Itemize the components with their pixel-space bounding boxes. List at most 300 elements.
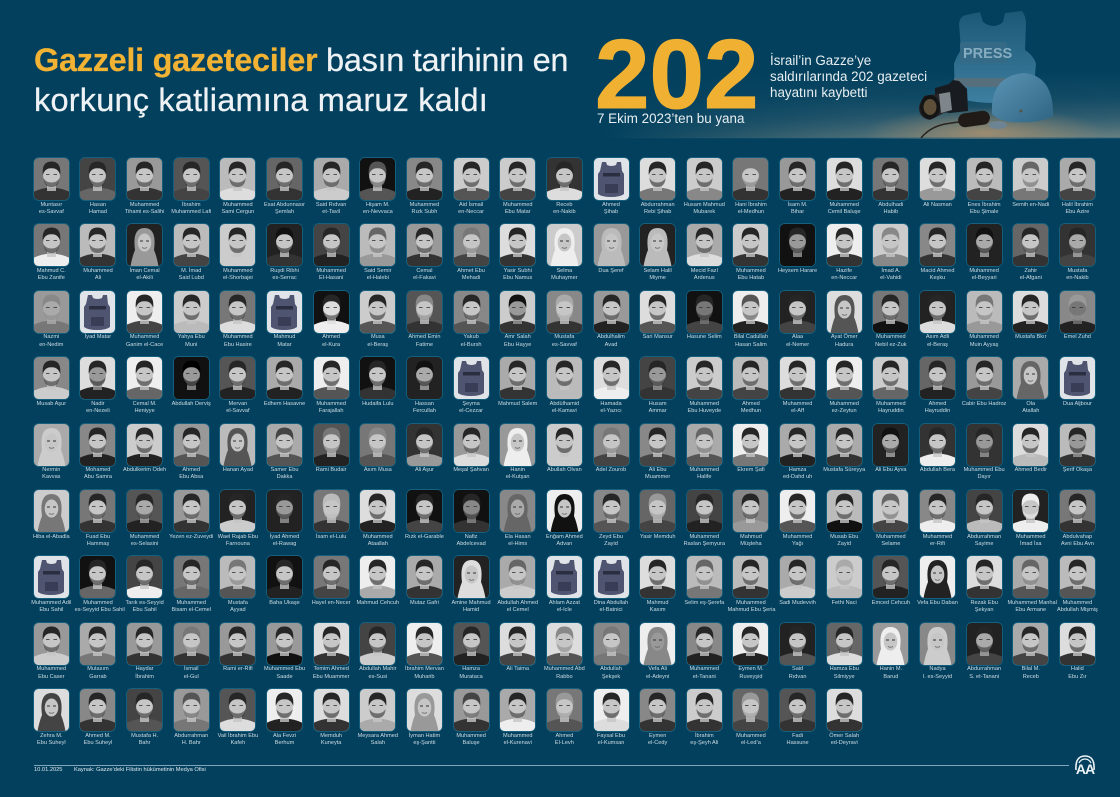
portrait: Muhammed er-Rifi [914,490,961,556]
portrait: Hişam M. en-Nevvaca: Hişam M. [366,202,390,208]
portrait: Muhammed el-Shorbajei: Muhammed [223,268,253,274]
portrait: Dua Şeref [593,223,630,274]
portrait: Hasan Hamad: Hamad [89,209,107,215]
portrait: Muhammed Halife: Halife [697,474,711,480]
portrait: Zehra M. Ebu Suheyl: Zehra M. [40,733,63,739]
portrait: Mutaz Gafri: Mutaz Gafri [410,600,439,606]
portrait: Hassan Fercullah: Fercullah [413,408,436,414]
portrait: Hazife en-Neccar [821,224,868,291]
portrait: İyad Ahmed el-Rawag [261,490,308,556]
portrait: Ahmed Hayruddin: Ahmed [929,401,946,407]
portrait: Amine Mahmud Hamid: Amine Mahmud [451,600,491,606]
portrait: Mahmud Kasım [634,556,681,623]
portrait: Ali Nasman [919,157,956,208]
portrait: Hudaifa Lulu [354,357,401,424]
portrait: Mustafa Süreyya [821,424,868,490]
portrait: Mustafa H. Bahr: Bahr [139,740,151,746]
portrait: Receb en-Nakib [546,157,583,215]
portrait: Muhammed Baluşe: Muhammed [456,733,486,739]
portrait: Ela Hasan el-Hims [494,490,541,556]
portrait: Muhammed Ebu Saade: Saade [276,674,293,680]
portrait: Nermin Kavvas: Kavvas [42,474,60,480]
portrait: Eymen el-Cedy [634,689,681,756]
portrait: Yezen ez-Zuveydi: Yezen ez-Zuveydi [169,534,213,540]
portrait: Abdülhamid el-Kamavi [541,357,588,424]
portrait: Muhammed Ebu Matar: Ebu Matar [505,209,531,215]
portrait: Emel Zuhd: Emel Zuhd [1064,334,1091,340]
portrait: Muhammed Nebil ez-Zuk: Muhammed [876,334,906,340]
portrait: Fethi Naci [821,556,868,623]
portrait: Enğam Ahmed Advan: Advan [556,541,572,547]
portrait: Hanan Ayad: Hanan Ayad [223,467,253,473]
portrait: Heysem Harare: Heysem Harare [778,268,817,274]
portrait: Zeyd Ebu Zayid: Zeyd Ebu [599,534,623,540]
portrait: Cemal M. Heniyye [121,357,168,424]
portrait: Ahmed Medhun: Ahmed [742,401,760,407]
portrait: Muhammed Abd Rabbo: Rabbo [556,674,573,680]
portrait: Mustafa en-Nakib: Mustafa [1067,268,1087,274]
portrait: Muhammed es-Seyyid Ebu Sahil: es-Seyyid Ebu Sahil [75,607,125,613]
portrait: Eymen el-Cedy: Eymen [649,733,666,739]
portrait: Muhammed Ebu Huveyde [681,357,728,424]
icon: camera [919,80,968,120]
portrait: Mahmud Cehcuh [354,556,401,623]
portrait: Ruşdi Ribhi es-Serrac: es-Serrac [272,275,297,281]
portrait: Nazmi en-Nedim [28,291,75,357]
portrait: Halid Ebu Zır: Ebu Zır [1068,674,1087,680]
portrait: Rezak Ebu Şekyan [961,556,1007,623]
portrait: Muhammed er-Rifi: Muhammed [923,534,952,540]
portrait: Mustafa es-Savvaf: Mustafa [554,334,574,340]
portrait: Muhammed ez-Zeytun: Muhammed [829,401,859,407]
portrait: Meysara Ahmed Salah [354,689,401,756]
portrait: Eymen M. Ruveyşid [728,623,774,689]
portrait: Haydar İbrahim [121,623,168,689]
portrait: Muhammed Tihami es-Salihi: Tihami es-Salihi [125,209,164,215]
portrait: Halil İbrahim Ebu Azire: Halil İbrahim [1062,202,1093,208]
portrait: Hasan Hamad [79,157,116,215]
portrait: Muhammed el-Aff [774,357,821,424]
portrait: Yahya Ebu Muni: Muni [185,342,197,348]
lead text [770,52,927,100]
portrait: Rızk el-Garable: Rızk el-Garable [405,534,444,540]
header image: press vest, helmet, camera and microphone on sand [626,11,1120,139]
portrait: Bilal Cadullah Hasan Salim: Hasan Salim [735,342,767,348]
portrait: Muhammed el-Shorbajei: el-Shorbajei [223,275,253,281]
portrait: Muhammed ez-Zeytun [821,357,868,424]
portrait: Ahmed el-Kura: el-Kura [322,342,340,348]
portrait: Aid İsmail en-Neccar: en-Neccar [458,209,484,215]
portrait: Abdurrahman Sayime: Sayime [975,541,993,547]
portrait: Abdullah Mahir es-Susi: Abdullah Mahir [359,666,396,672]
portrait: Dua Şeref: Dua Şeref [598,268,624,274]
portrait: Muhammed Ebu Hasire [215,291,261,357]
portrait: Muhammed Ebu Dayır [961,424,1007,490]
portrait: Bilal M. Receb [1007,623,1054,689]
portrait: Ola Atallah: Ola [1026,401,1035,407]
portrait: Abdurrahman Rebi Şihab: Abdurrahman [641,202,675,208]
portrait: Abdullah Mahir es-Susi: es-Susi [368,674,387,680]
portrait: Hani İbrahim el-Medhun [732,157,769,215]
portrait: Muhammed Rızk Subh: Rızk Subh [412,209,437,215]
portrait: Abdurrahman S. et-Tanani [961,623,1007,689]
portrait: Abdülhamid el-Kamavi: el-Kamavi [552,408,577,414]
portrait: Selam Halil Miyme: Selam Halil [644,268,672,274]
portrait: Muhammed Ebu Saade: Muhammed Ebu [264,666,305,672]
portrait: Ahmed Medhun: Medhun [741,408,761,414]
portrait: İyman Hatim eş-Şantti: İyman Hatim [409,733,440,739]
portrait: Enes İbrahim Ebu Şimale: Ebu Şimale [970,209,998,215]
portrait: Tarık es-Seyyid Ebu Sahil [121,556,168,623]
portrait: Abdulhalim Avad: Avad [605,342,617,348]
portrait: Hamza Ebu Silmiyye: Hamza Ebu [830,666,859,672]
portrait: Sadi Mudevvih: Sadi Mudevvih [779,600,816,606]
portrait: Muhammed Ganim el-Cace: Ganim el-Cace [126,342,163,348]
portrait: Muhammed Farajallah: Farajallah [319,408,343,414]
portrait: Ahmed M. Ebu Suheyl: Ahmed M. [85,733,111,739]
portrait: Muhammed Halife: Muhammed [690,467,719,473]
portrait: Vail İbrahim Ebu Kafeh: Vail İbrahim Ebu [218,733,258,739]
portrait: Abdullah Ahmed el Cemel [494,556,541,623]
portrait: Hanin M. Barud: Barud [883,674,898,680]
portrait: Wael Rajab Ebu Farnouna: Wael Rajab Ebu [218,534,258,540]
portrait: Semih en-Nadi [1012,157,1049,208]
portrait: Yakub el-Bursh [448,291,494,357]
portrait: Mervan el-Savvaf: el-Savvaf [226,408,250,414]
portrait: Nermin Kavvas [28,424,75,490]
portrait: Yasir Subhi Ebu Namus [499,223,536,281]
portrait: Hamza ed-Dahd uh: Hamza [789,467,806,473]
portrait: Fadi Hassune [774,689,821,756]
portrait: Muhammed Abd Rabbo: Muhammed Abd [544,666,585,672]
portrait: Ali Ebu Ayva: Ali Ebu Ayva [875,467,906,473]
portrait: Muhammed Tihami es-Salihi [124,157,164,215]
portrait: İyad Ahmed el-Rawag: el-Rawag [273,541,296,547]
portrait: Hanin el-Kutşan: el-Kutşan [506,474,530,480]
icon: AA logo [1074,754,1096,776]
portrait: Ahmed Ebu Absa: Ebu Absa [179,474,203,480]
portrait: Mervan el-Savvaf [215,357,261,424]
portrait: Muhammed et-Tanani: Muhammed [690,666,719,672]
portrait: Mustafa Süreyya: Mustafa Süreyya [823,467,865,473]
portrait: Haydar İbrahim: İbrahim [135,674,154,680]
portrait: Receb en-Nakib: Receb [556,202,572,208]
portrait: Muhammed Baluşe [448,689,494,756]
portrait: Mustafa H. Bahr: Mustafa H. [131,733,158,739]
portrait: Ala Fevzi Berhum: Berhum [275,740,294,746]
portrait: Edhem Hasavne: Edhem Hasavne [264,401,305,407]
portrait: Muhammed Abdullah Mişmiş: Abdullah Mişmiş [1057,607,1098,613]
portrait: Muhammed Cemil Baluşe: Muhammed [829,202,859,208]
portrait: Muhammed Raslan Şemyura [681,490,728,556]
portrait: Temim Ahmed Ebu Muammer: Ebu Muammer [313,674,350,680]
portrait: Muhammed Abdullah Mişmiş [1054,556,1101,623]
portrait: Haydar İbrahim: Haydar [136,666,154,672]
portrait: Mustafa H. Bahr [121,689,168,756]
portrait: Hamza Ebu Silmiyye [821,623,868,689]
portrait: Abdullah Bera: Abdullah Bera [920,467,955,473]
portrait: Cemal M. Heniyye: Cemal M. [133,401,157,407]
portrait: İbrahim eş-Şeyh Ali [681,689,728,756]
portrait: Ahmed El-Levh: Ahmed [556,733,573,739]
portrait: Muhammed Sami Cergun: Muhammed [223,202,253,208]
portrait: Tarık es-Seyyid Ebu Sahil: Ebu Sahil [133,607,157,613]
portrait: Hanin el-Kutşan: Hanin [510,467,525,473]
portrait: Muntasır es-Savvaf: Muntasır [40,202,62,208]
portrait: Asım Musa [354,424,401,490]
portrait: Fadi Hassune: Hassune [787,740,809,746]
portrait: Vail İbrahim Ebu Kafeh [215,689,261,756]
portrait: Muhammed Manhal Ebu Armane: Muhammed Manhal [1007,600,1057,606]
portrait: Hişam M. en-Nevvaca [359,157,396,215]
portrait: İbrahim eş-Şeyh Ali: İbrahim [695,733,714,739]
portrait: Alaa el-Nemer [774,291,821,357]
portrait: Ahmed Emin Fatime [401,291,448,357]
portrait: İsmail el-Gul [168,623,215,689]
portrait: Ruşdi Ribhi es-Serrac [266,223,303,281]
portrait: Abdurrahman Sayime: Abdurrahman [967,534,1001,540]
portrait: Halid Ebu Zır [1054,623,1101,689]
portrait: Mustafa es-Savvaf: es-Savvaf [552,342,577,348]
portrait: Adel Zourob [588,424,634,490]
portrait: Macid Ahmed Keşku [914,224,961,291]
portrait: Sari Mansur: Sari Mansur [643,334,673,340]
portrait: Nazmi en-Nedim: Nazmi [43,334,59,340]
portrait: Ela Hasan el-Hims: el-Hims [508,541,527,547]
portrait: Muhammed Cemil Baluşe: Cemil Baluşe [828,209,861,215]
portrait: Hamada el-Yazıcı: Hamada [600,401,622,407]
portrait: Muhammed Selame: Muhammed [876,534,906,540]
portrait: Musab Aşur: Musab Aşur [37,401,66,407]
portrait: Mecid Fazl Ardenus: Ardenus [694,275,715,281]
portrait: Muhammed Ebu Hatab [728,224,774,291]
portrait: Zahir el-Afgani [1007,224,1054,291]
portrait: Eymen el-Cedy: el-Cedy [648,740,667,746]
portrait: Enğam Ahmed Advan [541,490,588,556]
portrait: Rezak Ebu Şekyan: Rezak Ebu [970,600,998,606]
portrait: Faysal Ebu el-Kumsan: el-Kumsan [598,740,624,746]
portrait: Alaa el-Nemer: Alaa [792,334,803,340]
portrait: Muhammed İmad İsa: İmad İsa [1020,541,1042,547]
portrait: Muhammed Sami Cergun: Sami Cergun [222,209,254,215]
portrait: Muhammed Manhal Ebu Armane: Ebu Armane [1015,607,1046,613]
portrait: Cemal el-Fakavi [406,223,443,281]
portrait: Said Rıdvan: Said [792,666,803,672]
portrait: Abdullah Mahir es-Susi [354,623,401,689]
portrait: Ali Aşur [401,424,448,490]
portrait: Alaa el-Nemer: el-Nemer [786,342,809,348]
portrait: Fadi Hassune: Fadi [792,733,803,739]
portrait: Wael Rajab Ebu Farnouna [215,490,261,556]
icon: microphone [921,110,1007,138]
portrait: Muhammed Ebu Saade [261,623,308,689]
portrait: Yasir Memduh [634,490,681,556]
portrait: Mustafa Bkır: Mustafa Bkır [1015,334,1046,340]
portrait: Yasir Subhi Ebu Namus: Yasir Subhi [504,268,532,274]
portrait: Musab Ebu Zayid: Musab Ebu [830,534,858,540]
portrait: Sadi Mudevvih [774,556,821,623]
portrait: Abdullah Ahmed el Cemel: Abdullah Ahmed [497,600,538,606]
portrait: Muhammed Bisam el-Cemel: Muhammed [176,600,206,606]
portrait: Ayat Ömer Hadura [821,291,868,357]
portrait: Mahmud C. Ebu Zanife: Ebu Zanife [38,275,65,281]
portrait: Said Semir el-Halebi: el-Halebi [367,275,389,281]
portrait: Dina Abdullah el-Batnici [588,556,634,623]
portrait: Rızk el-Garable [401,490,448,556]
portrait: Yahya Ebu Muni [168,291,215,357]
portrait: Fuad Ebu Hammaş: Hammaş [87,541,109,547]
portrait: Ahmed Emin Fatime: Fatime [416,342,433,348]
portrait: İyad Ahmed el-Rawag: İyad Ahmed [270,534,299,540]
portrait: Hamza ed-Dahd uh: ed-Dahd uh [783,474,812,480]
portrait: Halil İbrahim Ebu Azire [1059,157,1096,215]
portrait: Ahlam Azzat el-Icle [541,556,588,623]
portrait: Muhammed el-Kurenavi [494,689,541,756]
portrait: Muhammed Farajallah: Muhammed [316,401,346,407]
portrait: İsam el-Lulu: İsam el-Lulu [316,534,346,540]
portrait: Ahmet Ebu Mehadi: Ahmet Ebu [457,268,485,274]
portrait: Muhammed Nebil ez-Zuk: Nebil ez-Zuk [875,342,907,348]
portrait: Hamza ed-Dahd uh [774,424,821,490]
portrait: Bilal Cadullah Hasan Salim [728,291,774,357]
portrait: Abullah Olvan [541,424,588,490]
portrait: Baha Ukaşe: Baha Ukaşe [269,600,300,606]
portrait: Muhammed Hayruddin: Muhammed [876,401,906,407]
portrait: Muhammed es-Seyyid Ebu Sahil: Muhammed [83,600,113,606]
portrait: Mohamed Abu Samra: Mohamed [86,467,110,473]
portrait: Ahmed el-Kura [308,291,354,357]
portrait: Ruşdi Ribhi es-Serrac: Ruşdi Ribhi [270,268,299,274]
portrait: Muhammed Ataallah: Muhammed [363,534,393,540]
portrait: Said Rıdvan [774,623,821,689]
portrait: Abdurrahman Rebi Şihab: Rebi Şihab [644,209,671,215]
portrait: İman Cemal el-Akili [126,223,163,281]
portrait: Husam Ammar [634,357,681,424]
portrait: Cabir Ebu Hadroz [961,357,1007,424]
portrait: Ali Ebu Muammer [634,424,681,490]
big number 202: 202 [595,19,759,129]
portrait: Abdulkerim Odeh: Abdulkerim Odeh [123,467,166,473]
portrait: Hasan Hamad: Hasan [90,202,106,208]
portrait: M. İmad Said Lubd: Said Lubd [179,275,204,281]
portrait: Asım Adli el-Beraş: el-Beraş [927,342,948,348]
portrait: Selma Muhaymer: Muhaymer [551,275,578,281]
portrait: Semih en-Nadi: Semih en-Nadi [1012,202,1049,208]
portrait: Muhammed Rızk Subh: Muhammed [410,202,439,208]
portrait: Nadir en-Nezeli: en-Nezeli [86,408,110,414]
portrait: Mahmud C. Ebu Zanife: Mahmud C. [37,268,66,274]
portrait: Said Rıdvan et-Tavil: Said Rıdvan [316,202,346,208]
portrait: Muhammed Farajallah [308,357,354,424]
portrait: Meysara Ahmed Salah: Salah [371,740,385,746]
portrait: Muhammed Nebil ez-Zuk [868,291,914,357]
portrait: Hassan Fercullah: Hassan [415,401,434,407]
panel: journalist portrait grid [31,157,1098,746]
portrait: Faysal Ebu el-Kumsan [588,689,634,756]
portrait: Ekrem Şafi [728,424,774,490]
portrait: Heysem Harare [774,224,821,291]
portrait: İman Cemal el-Akili: el-Akili [136,275,153,281]
portrait: Muhammed er-Rifi: er-Rifi [930,541,945,547]
portrait: Nafiz Abdelcevad: Abdelcevad [456,541,486,547]
portrait: Husam Ammar: Husam [649,401,666,407]
portrait: Enes İbrahim Ebu Şimale [966,157,1003,215]
portrait: Muhammed el-Aff: Muhammed [783,401,812,407]
portrait: Asım Adli el-Beraş [914,291,961,357]
portrait: Nadir en-Nezeli: Nadir [91,401,105,407]
portrait: Abdurrahman H. Bahr: Abdurrahman [174,733,208,739]
portrait: Ali Aşur: Ali Aşur [415,467,434,473]
portrait: Abdülhamid el-Kamavi: Abdülhamid [550,401,579,407]
portrait: Nazmi en-Nedim: en-Nedim [39,342,63,348]
portrait: Muhammed Muin Ayyaş [961,291,1007,357]
portrait: Mahmud Müşteha: Müşteha [740,541,762,547]
portrait: İyman Hatim eş-Şantti [401,689,448,756]
portrait: Halid Ebu Zır: Halid [1071,666,1084,672]
portrait: Fethi Naci: Fethi Naci [832,600,857,606]
portrait: Ahmed Şihab: Ahmed [602,202,620,208]
portrait: Nafiz Abdelcevad: Nafiz [465,534,477,540]
portrait: Muhammed Ali: Ali [95,275,101,281]
portrait: Rami er-Rifi: Rami er-Rifi [223,666,253,672]
portrait: Cabir Ebu Hadroz: Cabir Ebu Hadroz [962,401,1006,407]
portrait: Nermin Kavvas: Nermin [42,467,60,473]
portrait: Hamza Murataca: Murataca [459,674,483,680]
portrait: Esat Abdunnasır Şemlah [264,157,305,215]
portrait: Zahir el-Afgani: el-Afgani [1020,275,1042,281]
portrait: Ali Ebu Muammer: Muammer [645,474,670,480]
portrait: Şeyma el-Cezzar: el-Cezzar [459,408,483,414]
portrait: Said Rıdvan et-Tavil: et-Tavil [322,209,340,215]
portrait: İsmail el-Gul: el-Gul [184,674,199,680]
portrait: Ahmed Bedir [1007,424,1054,490]
portrait: Muhammed Ebu Hatab: Muhammed [736,268,766,274]
portrait: Husam Ammar: Ammar [649,408,667,414]
portrait: Muhammed Ali: Muhammed [83,268,113,274]
portrait: Mutasım Garrab: Garrab [89,674,107,680]
portrait: Muhammed Ebu Caser: Muhammed [37,666,66,672]
portrait: Mahmud C. Ebu Zanife [33,223,70,281]
portrait: Hamza Ebu Silmiyye: Silmiyye [834,674,855,680]
portrait: Hudaifa Lulu: Hudaifa Lulu [362,401,394,407]
portrait: Mustafa es-Savvaf [541,291,588,357]
portrait: Macid Ahmed Keşku: Macid Ahmed [921,268,954,274]
portrait: İmad A. el-Vahidi [868,224,914,291]
portrait: Ali Taima: Ali Taima [506,666,529,672]
portrait: Ayat Ömer Hadura: Ayat Ömer [831,334,858,340]
portrait: Muhammed Ebu Huveyde: Muhammed [690,401,719,407]
portrait: Muhammed Mahmud Ebu Şeria [728,556,774,623]
portrait: Ala Fevzi Berhum: Ala Fevzi [273,733,296,739]
portrait: Ahmet Ebu Mehadi [453,223,490,281]
portrait: Hanan Ayad [215,424,261,490]
icon: press vest [954,11,1036,103]
portrait: Muhammed El-Hasani: El-Hasani [319,275,343,281]
portrait: Mahmud Matar: Matar [277,342,292,348]
portrait: Hamada el-Yazıcı [588,357,634,424]
portrait: Mecid Fazl Ardenus: Mecid Fazl [691,268,718,274]
portrait: İyad Matar [75,291,121,357]
portrait: İmad A. el-Vahidi: el-Vahidi [880,275,902,281]
portrait: Muhammed El-Hasani: Muhammed [316,268,346,274]
portrait: Musab Ebu Zayid: Zayid [837,541,851,547]
portrait: Muhammed Yağı: Muhammed [783,534,812,540]
portrait: Mecid Fazl Ardenus [681,224,728,291]
portrait: Macid Ahmed Keşku: Keşku [930,275,945,281]
portrait: Hayel en-Necer: Hayel en-Necer [312,600,351,606]
portrait: Ahmed Hayruddin [914,357,961,424]
portrait: Şeyma el-Cezzar [448,357,494,424]
